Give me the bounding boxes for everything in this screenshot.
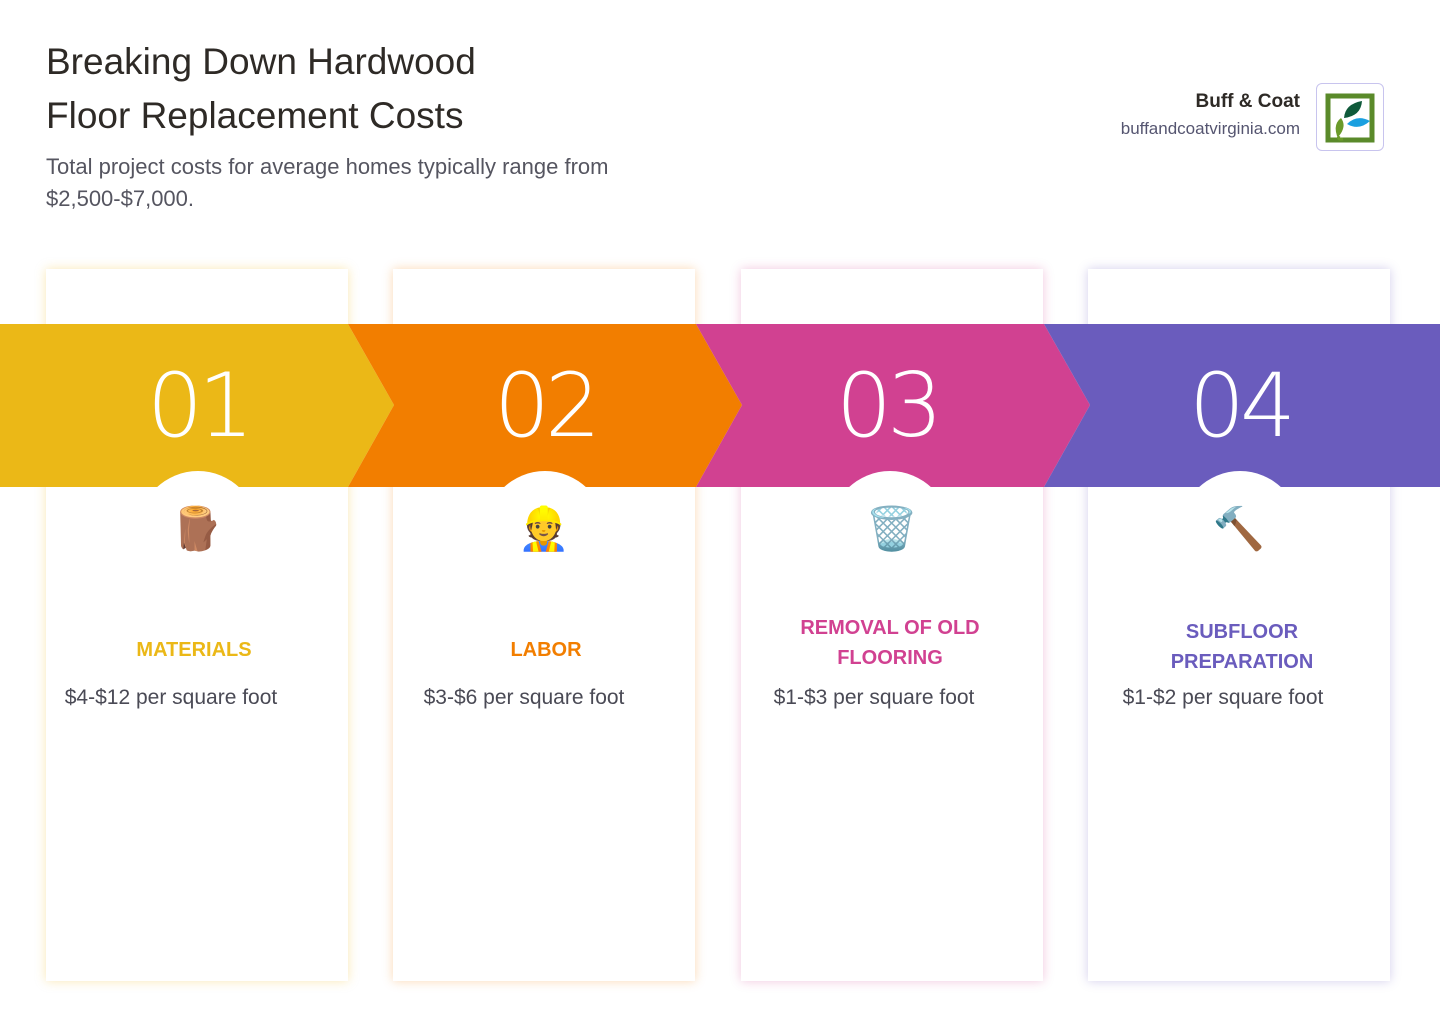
banner chevrons xyxy=(0,324,1440,487)
price 1: $4-$12 per square foot xyxy=(65,686,277,709)
title: Breaking Down Hardwood xyxy=(46,41,476,82)
brand: Buff & Coat xyxy=(1196,91,1300,112)
subtitle: Total project costs for average homes typically range from $2,500-$7,000. xyxy=(46,154,608,211)
brand: buffandcoatvirginia.com xyxy=(1121,119,1300,138)
price 3: $1-$3 per square foot xyxy=(774,686,974,709)
title: Floor Replacement Costs xyxy=(46,95,463,136)
card 2 xyxy=(393,269,695,981)
label: materials: MATERIALS xyxy=(136,639,252,661)
label: subfloor: SUBFLOOR xyxy=(1186,621,1298,643)
banner chevrons: 02 xyxy=(494,354,596,457)
banner chevrons: 04 xyxy=(1189,354,1291,457)
price 2: $3-$6 per square foot xyxy=(424,686,624,709)
price 4: $1-$2 per square foot xyxy=(1123,686,1323,709)
icon: wastebasket: 🗑️ xyxy=(866,505,918,552)
label: removal xyxy=(800,617,980,669)
label: removal: REMOVAL OF OLD xyxy=(800,617,980,639)
card 1 xyxy=(46,269,348,981)
brand xyxy=(1121,91,1300,138)
banner chevrons: 01 xyxy=(147,354,249,457)
label: subfloor xyxy=(1171,621,1313,673)
title xyxy=(46,41,476,136)
icon: hammer: 🔨 xyxy=(1213,505,1265,552)
icon: logs: 🪵 xyxy=(171,505,223,552)
logo xyxy=(1316,83,1384,151)
label: subfloor: PREPARATION xyxy=(1171,651,1313,673)
icon: worker: 👷 xyxy=(518,505,570,552)
card 4 xyxy=(1088,269,1390,981)
label: labor: LABOR xyxy=(510,639,582,661)
card 3 xyxy=(741,269,1043,981)
label: removal: FLOORING xyxy=(837,647,943,669)
banner chevrons: 03 xyxy=(836,354,938,457)
